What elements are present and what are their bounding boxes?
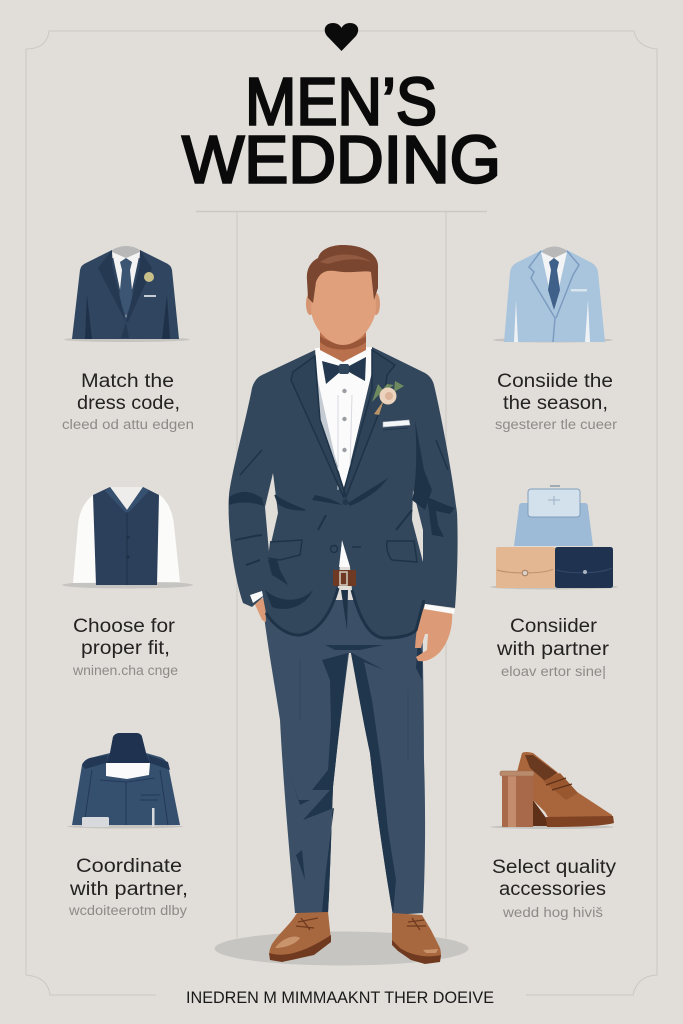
lapels	[291, 350, 395, 505]
shirt	[315, 347, 372, 567]
heading: Match the	[81, 371, 174, 392]
heading: accessories	[499, 879, 606, 900]
caption: wedd hog hiviš	[502, 905, 603, 920]
left shoe	[269, 912, 331, 962]
heading: Consiide the	[497, 371, 613, 392]
heading: Choose for	[73, 616, 176, 637]
arm gaps	[265, 473, 278, 552]
heading	[496, 616, 610, 660]
caption: wcdoiteerotm dlby	[68, 903, 187, 918]
title	[182, 64, 501, 198]
icon: navy jacket with collar	[67, 733, 183, 828]
caption: cleed od attu edgen	[62, 417, 194, 432]
footer text: INEDREN M MIMMAAKNT THER DOEIVE	[186, 989, 494, 1007]
panel: select quality accessories	[490, 752, 617, 920]
caption: wninen.cha cnge	[72, 663, 178, 678]
title: MEN’S	[245, 64, 437, 140]
pocket square	[383, 420, 410, 430]
right shoe	[392, 913, 441, 964]
hands	[253, 598, 452, 661]
heading: Coordinate	[76, 856, 182, 877]
trousers	[262, 600, 425, 915]
central figure: groom in navy suit	[214, 245, 468, 966]
fold shadows	[229, 492, 264, 506]
panel: consider the season	[493, 246, 618, 432]
panel: match the dress code	[62, 246, 194, 432]
heading: with partner	[496, 639, 610, 660]
jacket	[229, 347, 458, 638]
panel: coordinate with partner	[67, 733, 188, 918]
bow tie	[322, 357, 366, 384]
heading	[497, 371, 613, 414]
title: WEDDING	[182, 122, 501, 198]
heading: Select quality	[492, 857, 617, 878]
ground shadow	[214, 932, 468, 966]
heading: proper fit,	[81, 638, 170, 659]
icon: stack of bags	[490, 486, 618, 590]
heading: the season,	[503, 393, 608, 414]
heading	[77, 371, 180, 414]
neck and head	[306, 245, 380, 362]
panel: choose for proper fit	[62, 487, 193, 678]
belt	[333, 570, 356, 586]
caption: eloav ertor sine|	[501, 664, 606, 679]
heading: Consiider	[510, 616, 598, 637]
pocket flaps	[268, 540, 302, 560]
icon: brown shoe and cylinder	[490, 752, 614, 829]
boutonniere	[372, 381, 404, 415]
panel: consider with partner	[490, 486, 618, 679]
cuffs	[250, 591, 455, 614]
heading: with partner,	[69, 879, 188, 900]
icon: waistcoat over white shirt	[62, 487, 193, 588]
heading: dress code,	[77, 393, 180, 414]
caption: sgesterer tle cueer	[495, 417, 618, 432]
heading	[69, 856, 188, 900]
heading	[492, 857, 617, 900]
hem lines	[266, 588, 338, 635]
icon: heart	[325, 23, 358, 51]
heading	[73, 616, 176, 659]
icon: light blue suit jacket	[493, 246, 613, 342]
icon: navy suit jacket	[64, 246, 190, 342]
